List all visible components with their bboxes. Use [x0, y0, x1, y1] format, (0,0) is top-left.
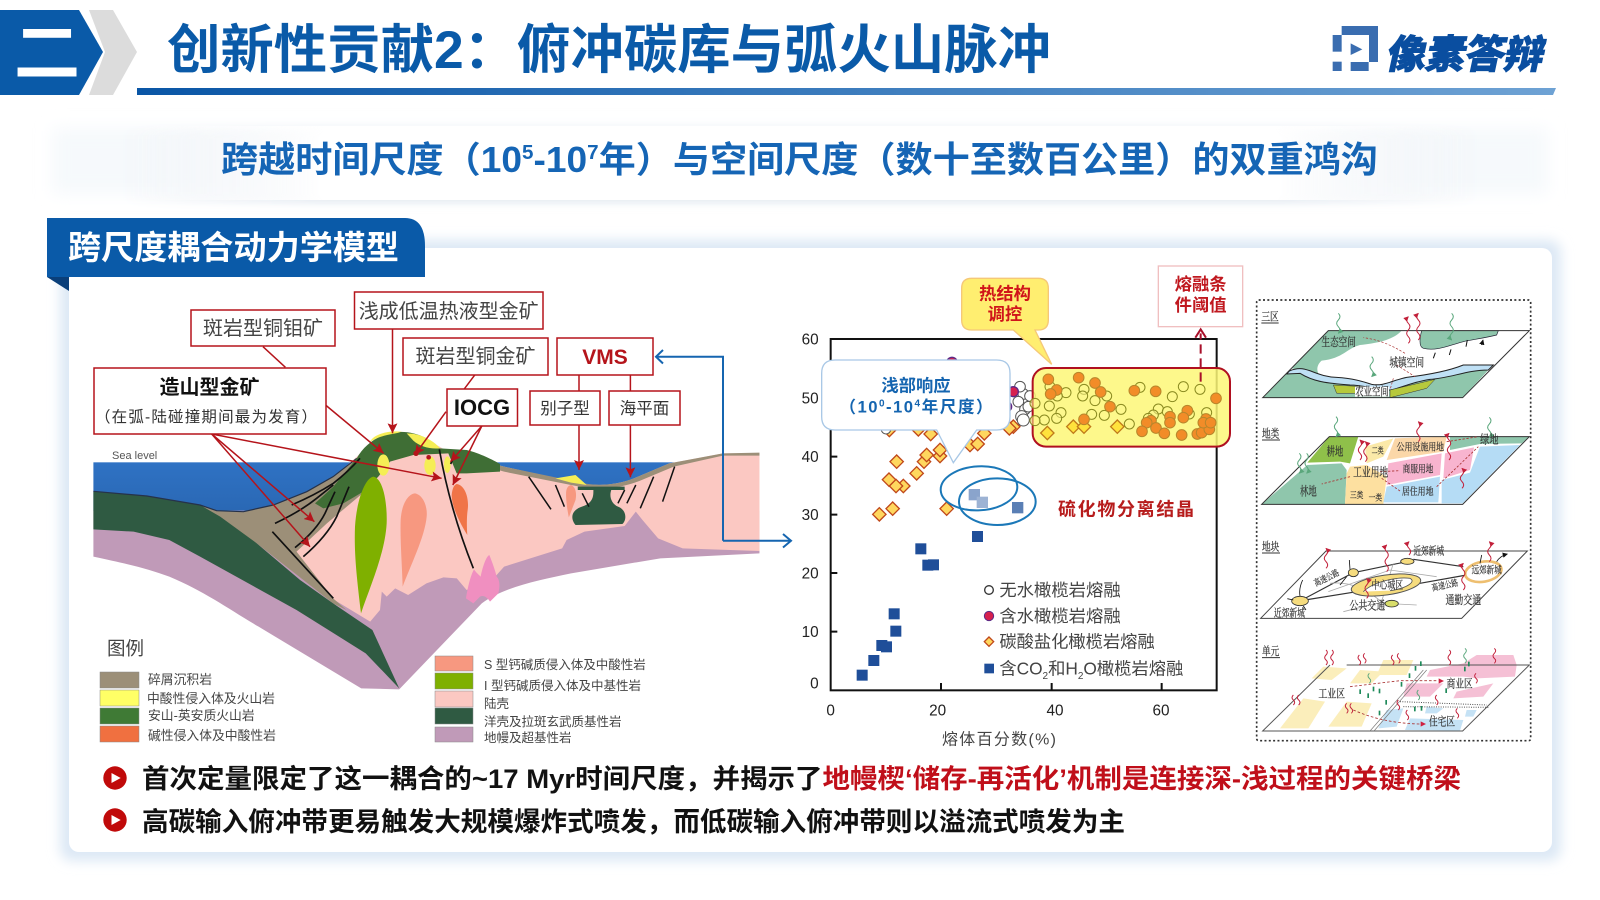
label: porphyry Cu-Au: 斑岩型铜金矿	[416, 345, 536, 368]
callout: melting threshold: 熔融条	[1175, 274, 1227, 294]
plot legend: 含CO	[999, 658, 1043, 678]
right legend column: I 型钙碱质侵入体及中基性岩	[484, 678, 641, 693]
plot legend: O橄榄岩熔融	[1083, 658, 1183, 678]
layer: land types: 工业用地	[1353, 465, 1388, 480]
layer: units: 住宅区	[1429, 715, 1455, 729]
right felsic rock and intrusions	[555, 475, 587, 485]
oceanic crust	[93, 492, 399, 688]
callout: shallow response: 浅部响应	[881, 375, 951, 395]
yellow felsic caps and pods	[370, 431, 402, 442]
label: epithermal gold: 浅成低温热液型金矿	[359, 300, 539, 323]
label: IOCG: IOCG	[454, 395, 510, 420]
layer: land types: 林地	[1300, 484, 1317, 499]
callout: thermal structure control	[962, 278, 1052, 364]
callout: thermal structure control: 热结构	[979, 283, 1031, 303]
logo	[1333, 26, 1549, 77]
base layers	[93, 433, 759, 689]
layer: units: 工业区	[1318, 686, 1345, 700]
left legend column: 碎屑沉积岩	[148, 672, 212, 687]
layer: blocks: 通勤交通	[1445, 592, 1481, 607]
CO2 and H2O melt squares	[857, 531, 983, 681]
label: sea floor	[609, 391, 680, 425]
layer: three zones: 农业空间	[1355, 385, 1389, 399]
layer: blocks	[1261, 540, 1527, 620]
logo wordmark: 像素答辩	[1383, 33, 1549, 77]
callout: shallow response: 4	[915, 399, 921, 410]
x axis labels: 20	[929, 702, 946, 719]
label: orogenic gold	[94, 368, 326, 434]
seabed line	[93, 458, 357, 512]
layer: land types: 居住用地	[1402, 485, 1433, 498]
layer: blocks: 公共交通	[1349, 597, 1385, 612]
subtitle band	[52, 126, 1548, 200]
subtitle text: 7	[587, 142, 599, 164]
label: porphyry Cu-Mo	[191, 310, 335, 346]
S-type intrusion	[401, 493, 427, 587]
section tab	[47, 218, 425, 291]
plot legend: 无水橄榄岩熔融	[999, 580, 1121, 600]
icon: bullet 2	[103, 808, 127, 832]
label: VMS	[557, 338, 653, 375]
callout: shallow response: 0	[879, 399, 885, 410]
left legend column: 碱性侵入体及中酸性岩	[148, 728, 276, 743]
layer: blocks: 近郊新城	[1274, 607, 1305, 620]
y axis labels: 10	[802, 624, 819, 641]
section tab: 跨尺度耦合动力学模型	[68, 229, 399, 266]
anhydrous melt open circles	[881, 381, 1035, 434]
left legend column: 中酸性侵入体及火山岩	[147, 691, 275, 706]
dotted frame	[1257, 300, 1531, 741]
callout: shallow response: 年尺度）	[922, 396, 993, 416]
section number badge	[0, 10, 137, 95]
label: orogenic gold: （在弧-陆碰撞期间最为发育）	[95, 408, 317, 426]
plot legend	[984, 580, 1183, 682]
finding 1 text: 首次定量限定了这一耦合的~17 Myr时间尺度，并揭示了 地幔楔‘储存-再活化’机制是连接深-浅过程的关键桥梁	[142, 764, 1461, 794]
layer: three zones: 三区	[1261, 311, 1279, 324]
label: sulfide segregation: 硫化物分离结晶	[1058, 499, 1194, 520]
layer: blocks: 地块	[1262, 540, 1279, 554]
x axis labels: 0	[826, 702, 835, 719]
x axis labels: 40	[1046, 702, 1064, 719]
y axis labels: 0	[810, 675, 819, 692]
sea level label: Sea level	[112, 450, 157, 462]
panel: multi-scale land use diagram	[1257, 300, 1531, 741]
legend: rock types	[100, 638, 646, 745]
plot frame and ticks	[831, 339, 1217, 690]
right seabed sediment	[451, 452, 759, 488]
layer: land types: 商服用地	[1403, 463, 1433, 476]
layer: land types: 二类	[1372, 444, 1384, 455]
label: sea floor: 海平面	[620, 399, 669, 418]
layer: three zones	[1261, 311, 1529, 399]
red leader arrows	[212, 329, 630, 547]
right legend column: 地幔及超基性岩	[484, 730, 572, 745]
layer: land types: 三类	[1350, 489, 1364, 500]
I-type intrusion	[355, 477, 387, 613]
hydrous melt circles	[947, 357, 1018, 412]
label: porphyry Cu-Au	[403, 338, 548, 375]
light squares in ellipses	[969, 489, 1023, 513]
finding 1	[103, 764, 1461, 794]
title: 创新性贡献2：俯冲碳库与弧火山脉冲	[167, 21, 1051, 80]
left legend column: 安山-英安质火山岩	[148, 708, 255, 723]
layer: land types: 耕地	[1327, 445, 1344, 459]
chart: melt fraction scatter plot	[802, 266, 1243, 749]
callout: shallow response: （10	[839, 397, 877, 416]
layer: blocks: 高速公路	[1431, 577, 1459, 593]
chart: tectonic cross-section	[93, 431, 759, 689]
callout: melting threshold: 件阈值	[1175, 295, 1227, 315]
y axis labels: 30	[802, 507, 819, 524]
callout: melting threshold	[1158, 266, 1243, 327]
label: VMS: VMS	[582, 346, 628, 369]
sea	[93, 462, 674, 511]
layer: units	[1262, 645, 1529, 731]
yellow diamonds in highlight box	[1041, 420, 1124, 440]
icon: pixel play mark	[1333, 26, 1378, 71]
x axis title: 熔体百分数(%)	[942, 731, 1056, 749]
layer: land types: 地类	[1262, 426, 1279, 440]
label: epithermal gold	[354, 292, 543, 329]
plot legend: 2	[1043, 671, 1049, 682]
legend heading: 图例	[107, 638, 144, 659]
callout: shallow response: -10	[886, 397, 913, 416]
arc mountain detail	[272, 431, 500, 613]
layer: blocks: 中心城区	[1371, 579, 1403, 592]
orange circles in highlight box	[1043, 372, 1221, 440]
left legend column	[100, 672, 276, 743]
right legend column: 洋壳及拉斑玄武质基性岩	[484, 714, 622, 729]
mantle	[93, 511, 759, 689]
y axis labels: 20	[802, 565, 819, 582]
plot legend: 碳酸盐化橄榄岩熔融	[999, 632, 1155, 652]
arc volcanic rocks	[315, 432, 500, 508]
label: porphyry Cu-Mo: 斑岩型铜钼矿	[203, 317, 323, 340]
title underline	[137, 88, 1556, 95]
continental crust	[272, 433, 759, 622]
finding 2	[103, 807, 1125, 837]
alkaline intrusion	[452, 484, 468, 535]
layer: blocks: 远郊新城	[1472, 564, 1502, 577]
plot legend: 2	[1078, 671, 1084, 682]
layer: blocks: 高速公路	[1312, 567, 1341, 588]
layer: units: 单元	[1262, 645, 1279, 658]
layer: land types: 一类	[1369, 492, 1382, 503]
right legend column	[435, 656, 646, 745]
layer: land types: 绿地	[1480, 431, 1499, 446]
x axis labels: 60	[1152, 702, 1170, 719]
subtitle text: 跨越时间尺度（10	[221, 139, 513, 180]
y axis labels: 40	[802, 449, 819, 466]
callout: shallow response	[822, 360, 1010, 463]
label: IOCG	[447, 389, 518, 426]
label: Besshi type: 别子型	[540, 399, 590, 418]
arrow: dashed threshold arrow	[1195, 329, 1206, 382]
plot legend: 和H	[1048, 658, 1078, 678]
right legend column: S 型钙碱质侵入体及中酸性岩	[484, 657, 646, 672]
y axis labels: 50	[802, 391, 819, 408]
y axis labels	[802, 332, 819, 692]
layer: blocks: 近郊新城	[1413, 545, 1444, 558]
callout: thermal structure control: 调控	[988, 304, 1022, 324]
layer: three zones: 生态空间	[1321, 335, 1356, 349]
layer: units: 商业区	[1447, 676, 1473, 690]
label: orogenic gold: 造山型金矿	[160, 375, 260, 399]
highlight box: thermal melt zone	[1033, 368, 1230, 447]
finding 2 text: 高碳输入俯冲带更易触发大规模爆炸式喷发，而低碳输入俯冲带则以溢流式喷发为主	[142, 807, 1125, 837]
label: Besshi type	[530, 391, 600, 425]
subtitle text: -10	[534, 139, 587, 180]
faults	[272, 449, 473, 598]
open circles in highlight box	[1030, 382, 1212, 429]
icon: bullet 1	[103, 766, 127, 790]
y axis labels: 60	[802, 332, 819, 349]
deposit labels and leaders	[94, 292, 680, 547]
arrow: VMS to chart	[656, 350, 791, 548]
layer: three zones: 城镇空间	[1389, 356, 1424, 370]
layer: land types: 公用设施用地	[1397, 441, 1444, 454]
right faults	[529, 467, 675, 509]
plot legend: 含水橄榄岩熔融	[999, 606, 1121, 626]
section number badge: 二	[14, 16, 80, 90]
sulfide ellipses	[940, 464, 1036, 525]
right legend column: 陆壳	[484, 696, 509, 711]
x axis labels	[826, 702, 1170, 719]
pink plumes	[466, 555, 499, 603]
main panel	[60, 240, 1561, 861]
subtitle text: 5	[522, 142, 534, 164]
layer: land types	[1262, 417, 1529, 504]
sediment	[147, 458, 367, 610]
carbonated melt diamonds	[873, 420, 1020, 521]
subtitle text: 年）与空间尺度（数十至数百公里）的双重鸿沟	[599, 139, 1378, 180]
